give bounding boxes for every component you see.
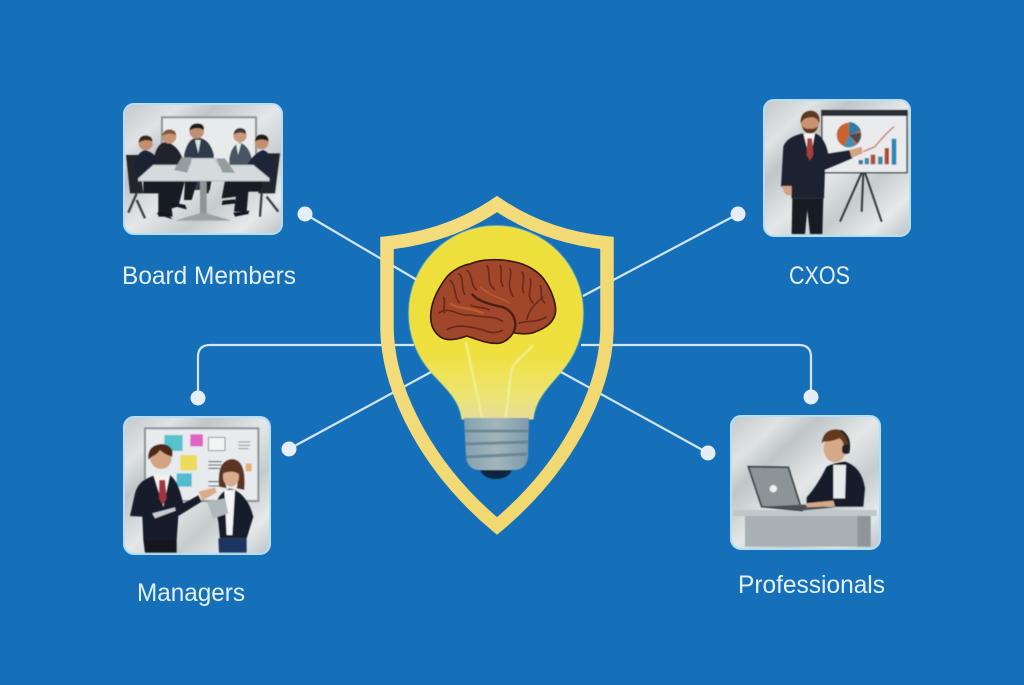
connector end dots xyxy=(190,206,818,460)
panel: board members xyxy=(124,104,282,234)
illustration: managers at sticky-note board xyxy=(130,428,258,553)
label: managers: Managers xyxy=(137,579,245,607)
card frame xyxy=(124,104,282,234)
illustration: boardroom meeting xyxy=(126,117,280,221)
label: CXOS: CXOS xyxy=(789,262,850,290)
connector: CXOS xyxy=(583,214,738,296)
panel: professionals xyxy=(731,416,880,549)
card frame xyxy=(124,417,270,554)
connector: board members xyxy=(305,214,417,280)
illustration: executive presenting chart xyxy=(781,110,908,234)
label: professionals: Professionals xyxy=(738,571,885,599)
light bulb glass xyxy=(409,226,583,419)
bulb screw base xyxy=(464,418,529,479)
connector: right elbow xyxy=(581,345,811,397)
connectors xyxy=(198,214,811,453)
panel: CXOS xyxy=(764,100,910,236)
connector: left elbow xyxy=(198,345,414,398)
card frame xyxy=(764,100,910,236)
central shield with light bulb and brain xyxy=(387,204,607,526)
illustration: professional at laptop with headset xyxy=(733,429,877,547)
connector: managers xyxy=(289,372,431,449)
brain xyxy=(431,260,556,343)
shield outline xyxy=(387,204,607,526)
panel: managers xyxy=(124,417,270,554)
connector: professionals xyxy=(561,372,708,453)
bulb filaments xyxy=(466,342,533,423)
card frame xyxy=(731,416,880,549)
label: board members: Board Members xyxy=(122,262,296,290)
